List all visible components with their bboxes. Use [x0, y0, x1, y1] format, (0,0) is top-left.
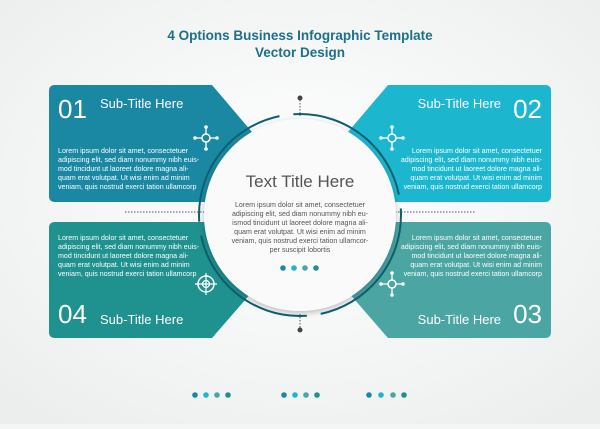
- panel: 02: mod tincidunt ut laoreet dolore magna ali-: [411, 165, 543, 173]
- panel: 03: Lorem ipsum dolor sit amet, consectetuer: [412, 234, 543, 242]
- center circle: quam erat volutpat. Ut wisi enim ad minim: [234, 228, 366, 236]
- center circle: ismod tincidunt ut laoreet dolore magna ali-: [232, 219, 368, 227]
- center circle: veniam, quis nostrud exerci tation ullamcor-: [232, 237, 369, 245]
- panel: 04: Lorem ipsum dolor sit amet, consectetuer: [58, 234, 189, 242]
- panel: 02: veniam, quis nostrud exerci tation ullamcorp: [404, 183, 542, 191]
- center circle: per suscipit lobortis: [270, 246, 331, 254]
- panel: 01: Sub-Title Here: [100, 96, 183, 111]
- panel: 04: veniam, quis nostrud exerci tation ullamcorp: [58, 270, 196, 278]
- icon: panel 01: [193, 125, 219, 151]
- panel: 04: quam erat volutpat. Ut wisi enim ad minim: [58, 261, 190, 269]
- panel: 03: [348, 222, 551, 338]
- panel: 03: quam erat volutpat. Ut wisi enim ad minim: [410, 261, 542, 269]
- center circle: [199, 114, 401, 316]
- center circle: Lorem ipsum dolor sit amet, consectetuer: [235, 201, 366, 209]
- panel: 03: mod tincidunt ut laoreet dolore magna ali-: [411, 252, 543, 260]
- title: Vector Design: [255, 45, 345, 60]
- panel: 04: [49, 222, 252, 338]
- panel: 01: 01: [58, 94, 87, 124]
- panel: 02: adipiscing elit, sed diam nonummy nibh euis-: [401, 156, 543, 164]
- center circle: adipiscing elit, sed diam nonummy nibh eu-: [232, 210, 369, 218]
- dots: center: [280, 265, 319, 271]
- panel: 03: adipiscing elit, sed diam nonummy nibh euis-: [401, 243, 543, 251]
- panel: 02: Sub-Title Here: [418, 96, 501, 111]
- panel: 04: Sub-Title Here: [100, 312, 183, 327]
- panel: 01: Lorem ipsum dolor sit amet, consectetuer: [58, 147, 189, 155]
- panel: 01: veniam, quis nostrud exerci tation ullamcorp: [58, 183, 196, 191]
- panel: 04: 04: [58, 299, 87, 329]
- panel: 02: Lorem ipsum dolor sit amet, consectetuer: [412, 147, 543, 155]
- dotted connectors: [125, 100, 475, 328]
- panel: 03: veniam, quis nostrud exerci tation ullamcorp: [404, 270, 542, 278]
- icon: panel 04: [195, 273, 217, 295]
- icon: panel 03: [379, 271, 405, 297]
- panel: 01: adipiscing elit, sed diam nonummy nibh euis-: [58, 156, 200, 164]
- title: [167, 28, 433, 60]
- panel: 03: Sub-Title Here: [418, 312, 501, 327]
- panel: 02: 02: [513, 94, 542, 124]
- panel: 01: quam erat volutpat. Ut wisi enim ad minim: [58, 174, 190, 182]
- panel: 01: mod tincidunt ut laoreet dolore magna ali-: [58, 165, 189, 173]
- center circle: Text Title Here: [246, 172, 354, 191]
- panel: 03: 03: [513, 299, 542, 329]
- panel: 02: [348, 85, 551, 202]
- icon: panel 02: [379, 125, 405, 151]
- title: 4 Options Business Infographic Template: [167, 28, 433, 43]
- panel: 04: mod tincidunt ut laoreet dolore magna ali-: [58, 252, 189, 260]
- dots: bottom: [192, 392, 407, 398]
- panel: 04: adipiscing elit, sed diam nonummy nibh euis-: [58, 243, 200, 251]
- panel: 02: quam erat volutpat. Ut wisi enim ad minim: [410, 174, 542, 182]
- panel: 01: [49, 85, 252, 202]
